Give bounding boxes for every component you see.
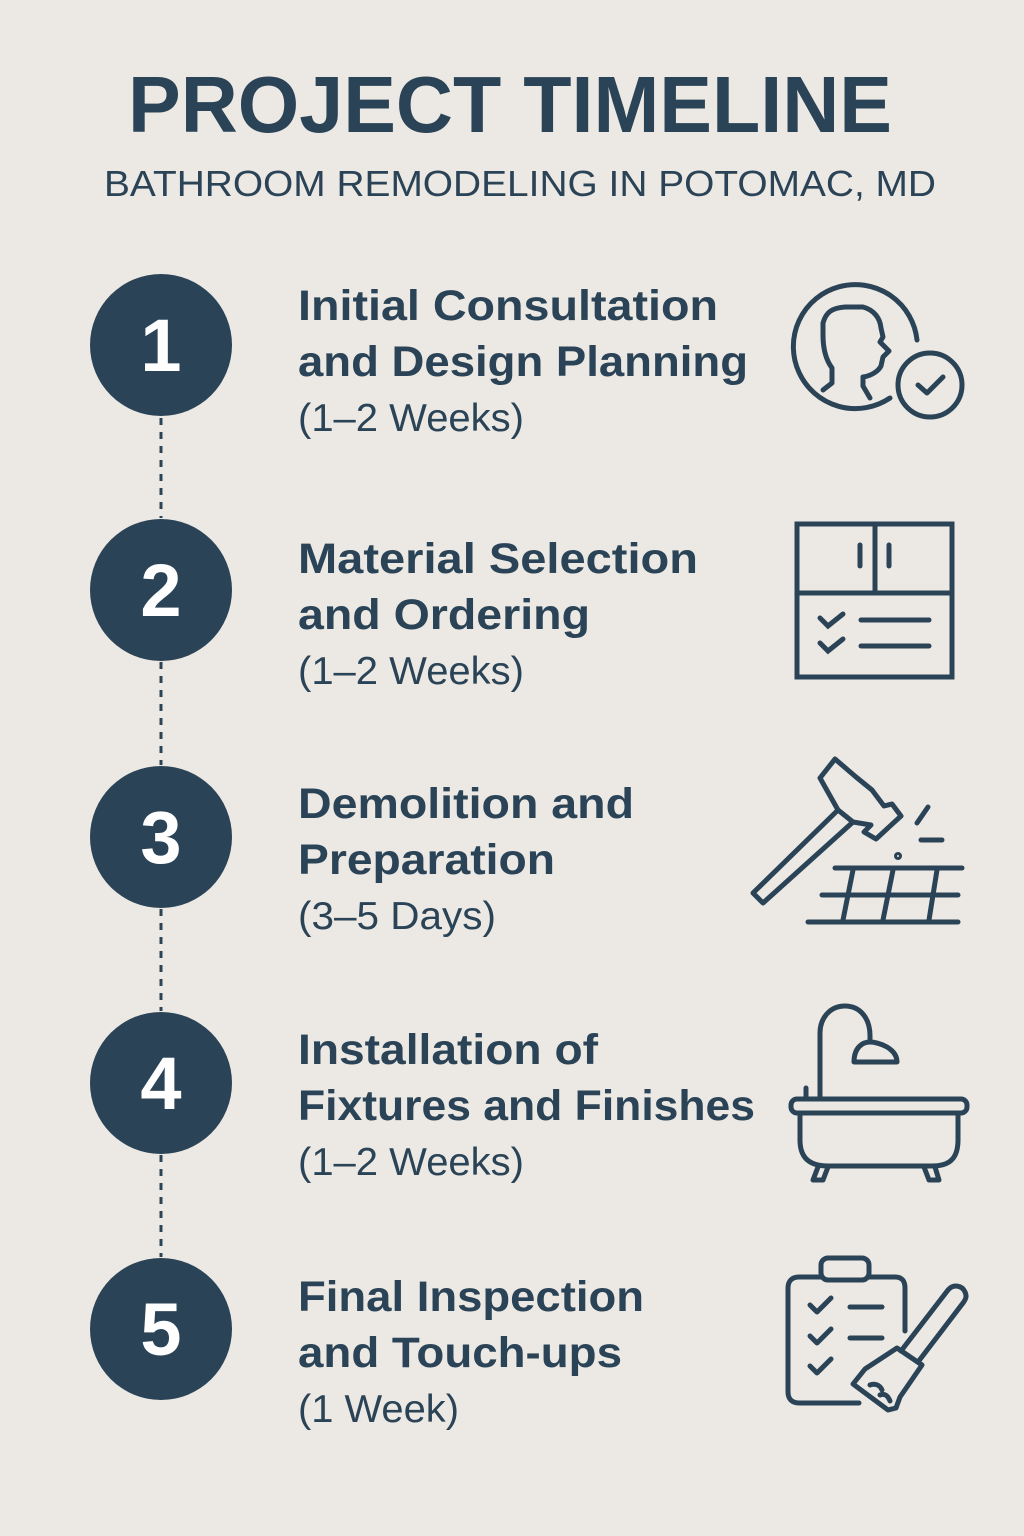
step 3: 3: [140, 796, 182, 879]
step 2: and Ordering: [298, 591, 590, 639]
step 3: [90, 766, 634, 938]
step 1: and Design Planning: [298, 338, 748, 386]
step 3: (3–5 Days): [298, 895, 496, 938]
step 5: 5: [140, 1288, 182, 1371]
step 4: [90, 1012, 755, 1184]
step 3: Demolition and: [298, 780, 634, 828]
step 4: (1–2 Weeks): [298, 1141, 524, 1184]
step 2: Material Selection: [298, 535, 698, 583]
icon: clipboard and brush: [788, 1258, 966, 1410]
step 1: 1: [140, 304, 182, 387]
title: PROJECT TIMELINE: [128, 60, 892, 149]
subtitle: BATHROOM REMODELING IN POTOMAC, MD: [104, 163, 936, 204]
step 2: (1–2 Weeks): [298, 650, 524, 693]
step 5: [90, 1258, 644, 1431]
icon: cabinet checklist: [797, 524, 952, 677]
step 1: Initial Consultation: [298, 282, 718, 330]
step 4: Installation of: [298, 1026, 599, 1074]
step 4: Fixtures and Finishes: [298, 1082, 755, 1130]
step 5: Final Inspection: [298, 1273, 644, 1321]
step 5: (1 Week): [298, 1388, 459, 1431]
icon: consultation: [793, 285, 962, 417]
step 2: [90, 519, 698, 693]
step 1: [90, 274, 748, 440]
step 4: 4: [140, 1042, 182, 1125]
step 2: 2: [140, 549, 182, 632]
step 3: Preparation: [298, 836, 555, 884]
step 5: and Touch-ups: [298, 1329, 622, 1377]
step 1: (1–2 Weeks): [298, 397, 524, 440]
icon: hammer and tiles: [753, 759, 962, 922]
icon: bathtub: [791, 1006, 967, 1180]
